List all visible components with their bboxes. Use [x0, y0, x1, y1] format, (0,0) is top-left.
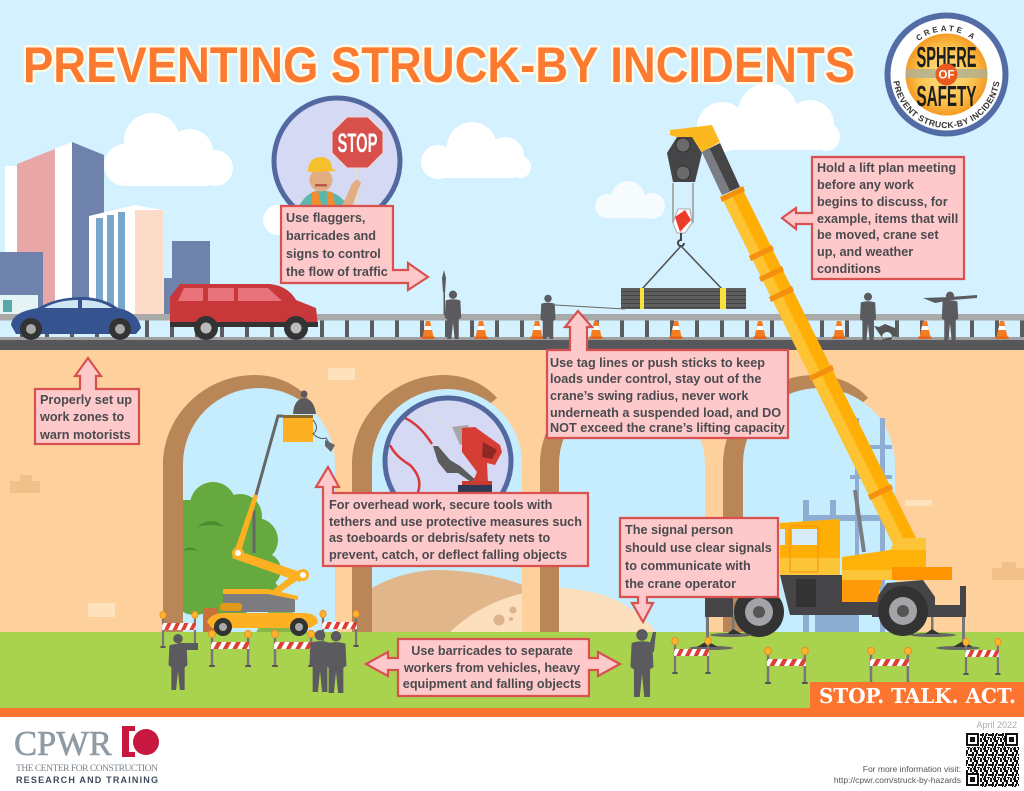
date: April 2022: [976, 720, 1017, 730]
drill circle icon: [385, 398, 511, 524]
callout: tag lines: NOT exceed the crane’s lifting capacity: [550, 421, 785, 435]
stop talk act banner: STOP. TALK. ACT.: [819, 684, 1016, 708]
barricades: [160, 610, 1001, 684]
deck workers silhouettes: [442, 270, 977, 342]
CPWR logo: RESEARCH AND TRAINING: [16, 775, 158, 785]
cones: [422, 321, 1008, 339]
badge: sphere of safety: [884, 12, 1008, 136]
callout: lift plan: begins to discuss, for: [817, 195, 948, 209]
callout: signal person: to communicate with: [625, 559, 751, 573]
wall bricks: [10, 368, 1024, 617]
more info text: For more information visit:: [863, 764, 961, 774]
more info text: http://cpwr.com/struck-by-hazards: [834, 775, 961, 785]
callout: tag lines: [547, 311, 788, 438]
callout: tag lines: crane’s swing radius, never work: [550, 389, 749, 403]
callout: tag lines: Use tag lines or push sticks to keep: [550, 356, 765, 370]
deck railing: [0, 314, 1024, 350]
callout: signal person: the crane operator: [625, 577, 736, 591]
callout: overhead work: For overhead work, secure tools with: [329, 498, 552, 512]
background sky: [0, 0, 1024, 350]
callout: overhead work: [316, 467, 588, 566]
callout: tag lines: loads under control, stay out of the: [550, 372, 761, 386]
flagger circle icon: STOP: [338, 128, 378, 158]
blue car: [11, 297, 141, 340]
CPWR logo: [14, 724, 159, 785]
callout: flaggers: the flow of traffic: [286, 265, 388, 279]
callout: signal person: The signal person: [625, 523, 733, 537]
clouds: [104, 83, 840, 235]
flagger circle icon: [274, 98, 400, 224]
callout: lift plan: conditions: [817, 262, 881, 276]
callout: lift plan: up, and weather: [817, 245, 913, 259]
callout: work zones: warn motorists: [39, 428, 131, 442]
sand hills: [372, 520, 657, 634]
callout: flaggers: Use flaggers,: [286, 211, 365, 225]
callout: barricades: workers from vehicles, heavy: [403, 661, 580, 675]
red car: [170, 284, 318, 340]
callout: lift plan: [782, 157, 964, 279]
callout: flaggers: signs to control: [286, 247, 381, 261]
callout: lift plan: before any work: [817, 178, 915, 192]
crane boom and truck: [670, 125, 980, 650]
callout: lift plan: example, items that will: [817, 212, 958, 226]
callout: work zones: work zones to: [39, 410, 125, 424]
CPWR logo: CPWR: [14, 724, 113, 763]
CPWR logo: THE CENTER FOR CONSTRUCTION: [16, 764, 158, 774]
arch 1: [163, 375, 335, 634]
callout: overhead work: tethers and use protective measures such: [329, 515, 582, 529]
arch 3: [540, 375, 705, 634]
callout: overhead work: prevent, catch, or deflect falling objects: [329, 548, 567, 562]
aerial lift: [207, 390, 335, 636]
callout: barricades: equipment and falling objects: [403, 677, 581, 691]
crane hook block and load: [621, 137, 746, 309]
callout: signal person: should use clear signals: [625, 541, 772, 555]
buildings: [0, 142, 210, 317]
arch 4: [723, 375, 895, 634]
callout: work zones: Properly set up: [40, 393, 132, 407]
title: PREVENTING STRUCK-BY INCIDENTS: [23, 37, 855, 93]
scaffolding building behind crane: [803, 418, 893, 634]
callout: tag lines: underneath a suspended load, and DO: [550, 406, 781, 420]
more info text: [834, 764, 961, 785]
callout: flaggers: barricades and: [286, 229, 376, 243]
tree: [183, 482, 293, 632]
ground: [0, 632, 1024, 709]
arch 2: [352, 375, 522, 634]
badge: sphere of safety: OF: [939, 70, 954, 82]
callout: overhead work: as toeboards or debris/safety nets to: [329, 531, 551, 545]
callout: signal person: [620, 518, 778, 622]
orange footer band: [0, 708, 1024, 717]
callout: barricades: Use barricades to separate: [411, 644, 573, 658]
QR code: [966, 733, 1019, 787]
callout: lift plan: be moved, crane set: [817, 228, 939, 242]
callout: flaggers: [281, 206, 428, 290]
bridge wall: [0, 350, 1024, 634]
callout: barricades: [366, 639, 620, 696]
callout: work zones: [35, 358, 139, 444]
badge: sphere of safety: PREVENT STRUCK-BY INCIDENTS: [894, 80, 1000, 128]
callout: lift plan: Hold a lift plan meeting: [817, 161, 956, 175]
ground workers silhouettes: [168, 629, 656, 697]
badge: sphere of safety: CREATE A: [916, 25, 974, 40]
